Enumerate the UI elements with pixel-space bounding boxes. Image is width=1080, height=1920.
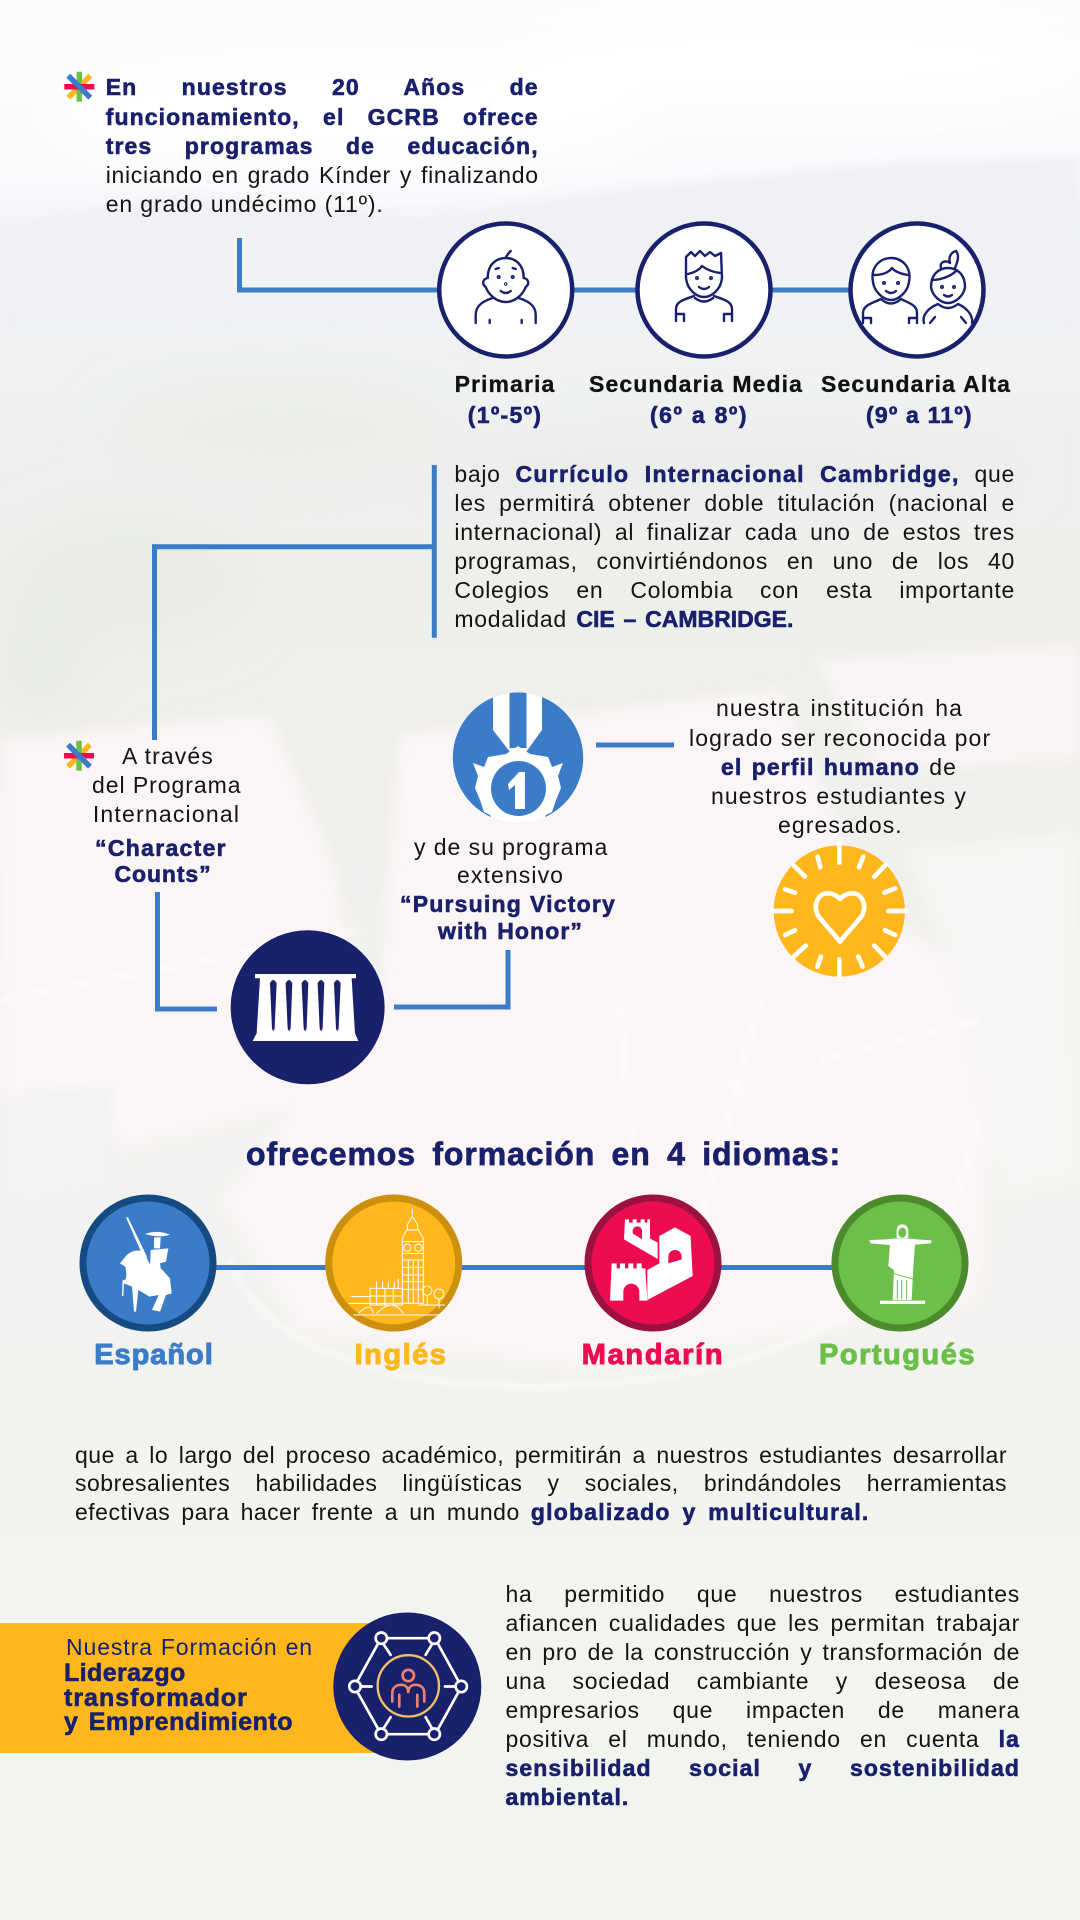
text block: languages description [75, 1442, 1007, 1526]
text block: Character Counts: “Character [95, 834, 227, 860]
text block: human profile: egresados. [778, 812, 903, 838]
icon: Português Christ the Redeemer [835, 1198, 965, 1328]
text block: leadership description: sensibilidad social y sostenibilidad [506, 1755, 1020, 1781]
text block: Character Counts [92, 742, 241, 886]
label: Secundaria Alta: (9º a 11º) [866, 402, 973, 428]
text block: leadership description: afiancen cualidades que les permitan trabajar [506, 1610, 1020, 1636]
label: Primaria [455, 371, 555, 428]
text block: leadership banner title [64, 1634, 313, 1736]
text block: human profile: nuestra institución ha [716, 695, 963, 721]
text block: Character Counts: A través [122, 742, 214, 768]
text block: Pursuing Victory: y de su programa [414, 834, 608, 860]
text block: leadership description: positiva el mundo, teniendo en cuenta la [506, 1726, 1020, 1752]
text block: intro: funcionamiento, el GCRB ofrece [106, 104, 539, 130]
label: Primaria: Primaria [455, 371, 555, 397]
text block: Pursuing Victory: “Pursuing Victory [400, 890, 616, 916]
connector: medal to text [596, 742, 674, 748]
label: Secundaria Media: Secundaria Media [589, 371, 803, 397]
text block: leadership description [506, 1581, 1020, 1810]
label: Español: Español [94, 1338, 214, 1370]
text block: human profile: el perfil humano de [721, 754, 957, 780]
text block: Pursuing Victory: extensivo [457, 862, 564, 888]
text block: Character Counts: del Programa [92, 772, 241, 798]
text block: Cambridge curriculum: programas, convirtiéndonos en uno de los 40 [454, 548, 1015, 574]
label: Secundaria Media: (6º a 8º) [650, 402, 748, 428]
text block: intro: tres programas de educación, [106, 132, 539, 158]
icon: sun with heart [772, 843, 907, 979]
label: Inglés: Inglés [355, 1338, 447, 1370]
text block: languages description: que a lo largo del proceso académico, permitirán a nuestros estudiantes desarrollar [75, 1442, 1007, 1468]
text block: intro: En nuestros 20 Años de [106, 74, 539, 100]
connector: character counts to temple [158, 892, 217, 1009]
text block: Cambridge curriculum: les permitirá obtener doble titulación (nacional e [454, 490, 1015, 516]
text block: human profile: logrado ser reconocida por [689, 724, 991, 750]
text block: leadership description: una sociedad cambiante y deseosa de [506, 1668, 1020, 1694]
text block: intro [106, 74, 539, 217]
label: Secundaria Media [589, 371, 803, 428]
icon: medal number one [452, 692, 584, 823]
label: Secundaria Alta [821, 371, 1011, 428]
icon: Español Don Quixote [83, 1198, 213, 1328]
text block: intro: en grado undécimo (11º). [106, 190, 384, 216]
icon: asterisk bullet middle [64, 741, 94, 771]
connector: Cambridge bracket [154, 465, 434, 740]
text block: Pursuing Victory [400, 834, 616, 944]
text block: leadership description: ambiental. [506, 1784, 629, 1810]
text block: intro: iniciando en grado Kínder y finalizando [106, 162, 539, 188]
icon: Inglés Big Ben [329, 1198, 459, 1328]
label: Primaria: (1º-5º) [468, 402, 542, 428]
text block: leadership description: en pro de la construcción y transformación de [506, 1639, 1020, 1665]
icon: temple columns [231, 930, 385, 1084]
text block: leadership banner title: Liderazgo [64, 1659, 186, 1687]
text block: Cambridge curriculum: modalidad CIE – CAMBRIDGE. [454, 606, 793, 632]
label: Mandarín: Mandarín [582, 1338, 724, 1370]
text block: Cambridge curriculum: internacional) al finalizar cada uno de estos tres [454, 519, 1015, 545]
connector: temple to victory [394, 950, 508, 1007]
text block: Cambridge curriculum [454, 461, 1015, 632]
text block: languages description: efectivas para hacer frente a un mundo globalizado y multicultural. [75, 1499, 870, 1525]
text block: Cambridge curriculum: bajo Currículo Internacional Cambridge, que [454, 461, 1015, 487]
text block: leadership description: ha permitido que nuestros estudiantes [506, 1581, 1020, 1607]
text block: languages description: sobresalientes habilidades lingüísticas y sociales, brindándoles herramientas [75, 1470, 1007, 1496]
text block: Character Counts: Internacional [93, 800, 240, 826]
text block: leadership banner title: Nuestra Formación en [66, 1634, 313, 1660]
heading: languages: ofrecemos formación en 4 idiomas: [246, 1136, 841, 1172]
icon: secundaria media teen [638, 224, 770, 356]
text block: human profile [689, 695, 991, 838]
icon: primaria child [439, 224, 572, 356]
connector: intro to programs [240, 238, 920, 290]
icon: Mandarín Great Wall [588, 1198, 718, 1328]
text block: leadership banner title: y Emprendimiento [64, 1708, 293, 1736]
icon: secundaria alta teens [850, 224, 984, 356]
banner: leadership yellow band [0, 1623, 385, 1753]
connector: language timeline [200, 1265, 850, 1270]
text block: Character Counts: Counts” [114, 860, 212, 886]
text block: leadership description: empresarios que impacten de manera [506, 1696, 1020, 1722]
text block: leadership banner title: transformador [64, 1684, 248, 1712]
icon: asterisk bullet top [64, 72, 94, 102]
icon: leadership network [333, 1613, 481, 1760]
label: Secundaria Alta: Secundaria Alta [821, 371, 1011, 397]
text block: human profile: nuestros estudiantes y [711, 782, 967, 808]
text block: Cambridge curriculum: Colegios en Colombia con esta importante [454, 576, 1015, 602]
label: Português: Portugués [819, 1338, 976, 1370]
text block: Pursuing Victory: with Honor” [438, 918, 583, 944]
